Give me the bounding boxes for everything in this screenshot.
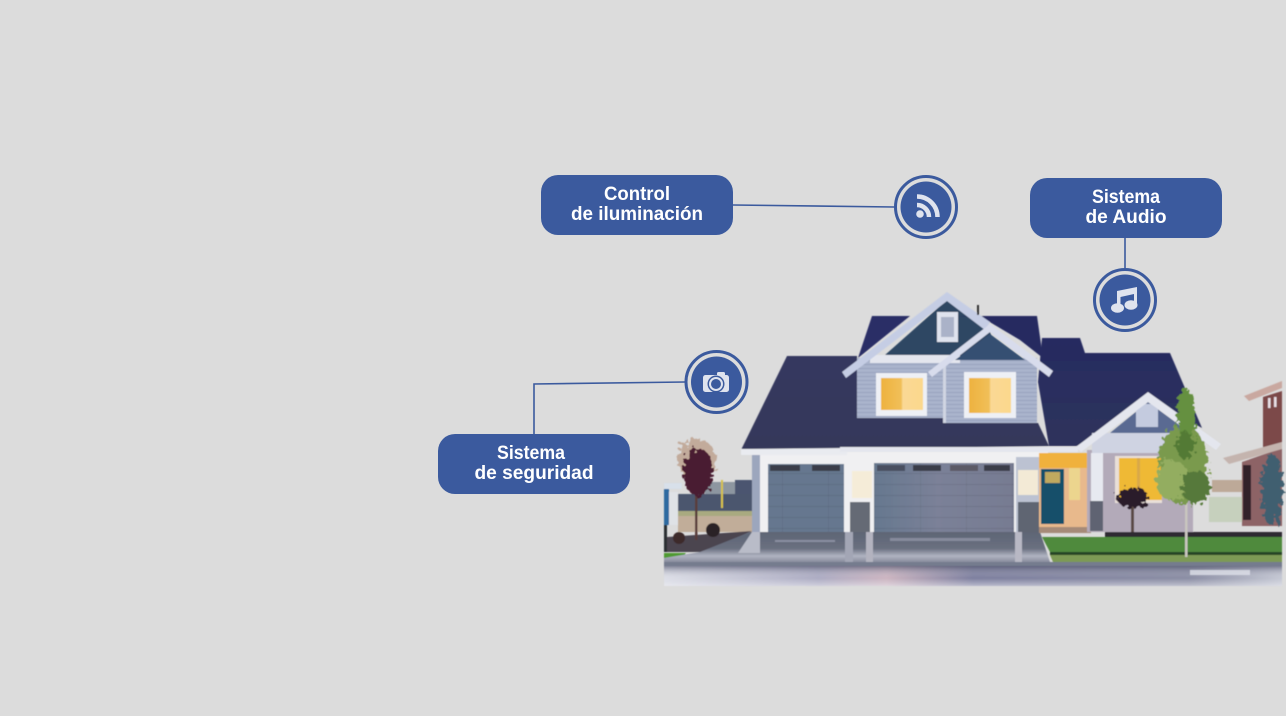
house photo [664,292,1283,586]
front tree [1155,388,1210,557]
connector: audio [1124,238,1126,268]
attic window [937,312,958,342]
label: audio system: Sistema [1092,187,1160,208]
maroon shrub [1117,488,1149,532]
street [664,566,1282,586]
left main roof [741,356,1049,450]
connector: lighting [733,205,894,207]
label: security system [438,434,630,494]
right wing wall [1087,450,1193,532]
right neighbouring house [1209,381,1283,526]
driveway [664,532,1050,562]
label: audio system: de Audio [1086,207,1166,228]
icon: camera [686,352,747,412]
right main roof [1038,338,1202,446]
stone columns and plaques [850,457,1041,532]
left garage door [768,464,844,532]
right garage door [874,463,1014,532]
front porch [1039,453,1091,533]
main house walls [752,300,1048,532]
icon: wifi / lighting signal [896,176,956,238]
left neighbouring yard [664,480,752,561]
connector: security [534,382,685,434]
left maroon tree [678,439,716,540]
upper roof [858,316,910,358]
right gable [1076,392,1221,453]
label: lighting control: Control [604,184,670,205]
label: security system: Sistema [497,443,565,464]
label: security system: de seguridad [474,463,594,484]
fascia [741,448,847,455]
label: audio system [1030,178,1222,238]
upper right window [964,372,1016,418]
upper left window [876,373,927,416]
gable trim [842,292,1053,378]
icon: music note [1094,270,1156,330]
label: lighting control: de iluminación [571,204,703,225]
lawn [1042,532,1282,562]
label: lighting control [541,175,733,235]
